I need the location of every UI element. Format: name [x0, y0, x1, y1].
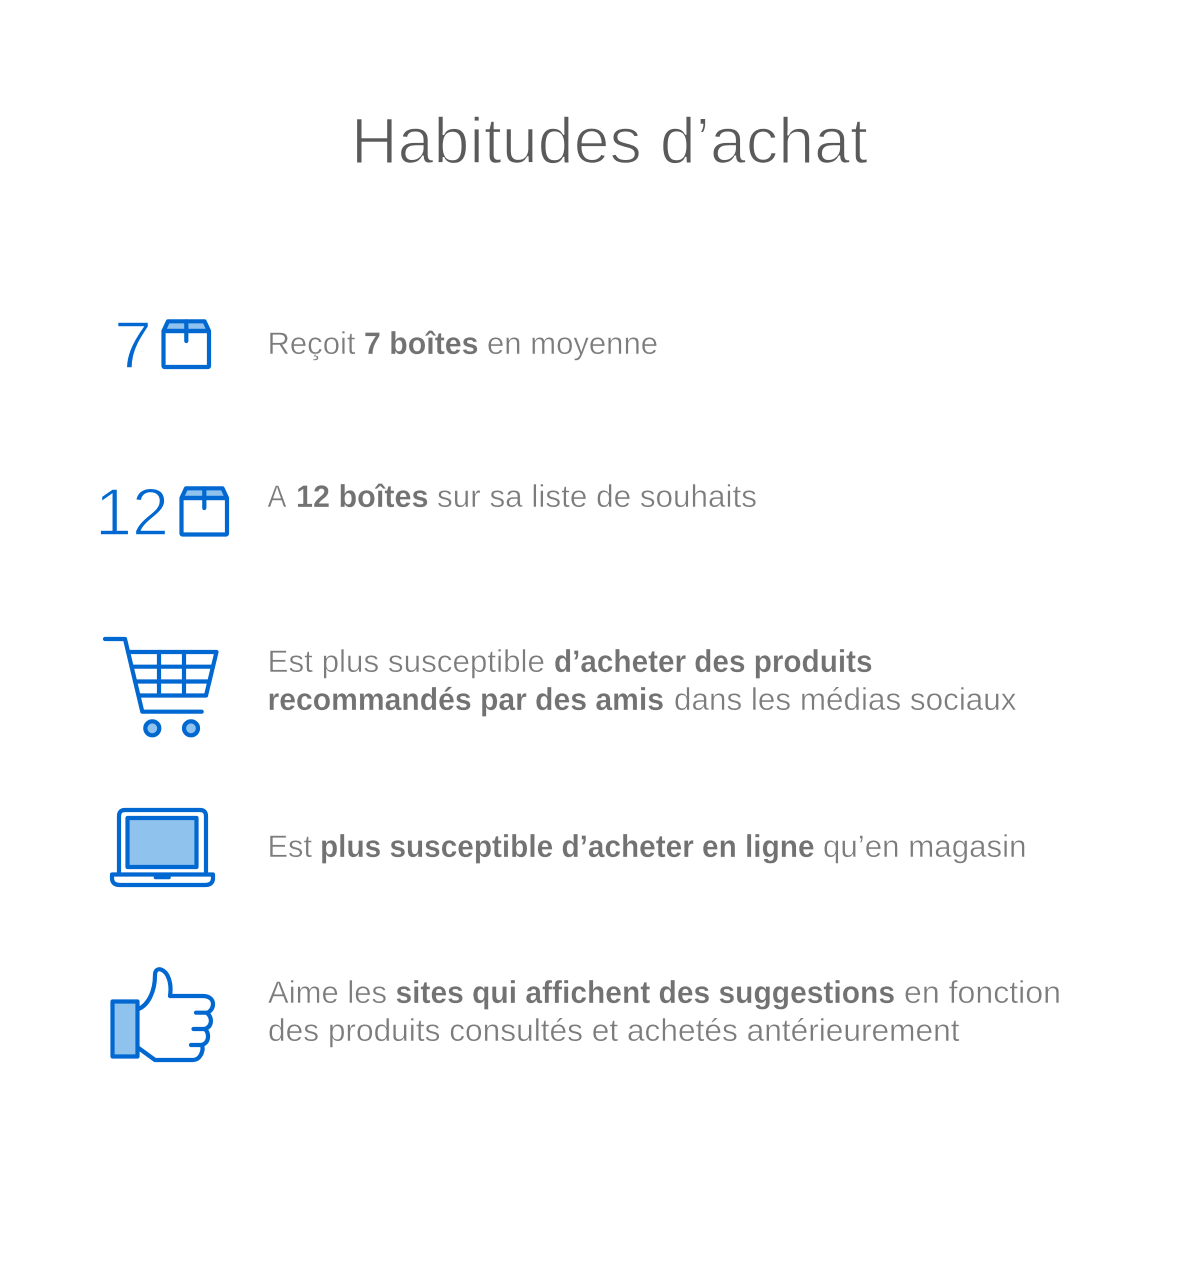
text: recommended by friends: d’acheter des produits	[554, 643, 872, 679]
icon: box	[182, 488, 227, 534]
row: laptop	[112, 810, 1026, 885]
text: wishlist	[268, 478, 757, 514]
text: suggestions: des produits consultés et achetés antérieurement	[268, 1012, 960, 1048]
text: online shopping: qu’en magasin	[823, 828, 1026, 864]
row: shopping cart	[105, 639, 1017, 735]
icon: box	[164, 321, 209, 367]
row: 7 boxes	[114, 308, 658, 383]
text: wishlist: sur sa liste de souhaits	[437, 478, 757, 514]
text: suggestions: sites qui affichent des suggestions	[396, 974, 895, 1010]
number 12: 12	[95, 475, 169, 550]
text: online shopping: plus susceptible d’acheter en ligne	[320, 828, 814, 864]
text: receives 7 boxes	[268, 325, 658, 361]
text: wishlist: A	[268, 478, 286, 514]
text: recommended by friends: recommandés par des amis	[268, 681, 664, 717]
number 7: 7	[114, 308, 152, 383]
title: Habitudes d’achat	[351, 104, 868, 177]
icon: thumbs up	[112, 969, 213, 1060]
text: recommended by friends	[268, 643, 1017, 717]
row: thumbs up	[112, 969, 1061, 1060]
text: receives 7 boxes: Reçoit	[268, 325, 356, 361]
text: recommended by friends: dans les médias sociaux	[674, 681, 1017, 717]
text: recommended by friends: Est plus susceptible	[268, 643, 545, 679]
text: suggestions	[268, 974, 1061, 1048]
text: receives 7 boxes: 7 boîtes	[364, 325, 478, 361]
icon: shopping cart	[105, 639, 216, 735]
text: suggestions: en fonction	[904, 974, 1061, 1010]
text: wishlist: 12 boîtes	[296, 478, 428, 514]
text: online shopping	[268, 828, 1026, 864]
icon: laptop	[112, 810, 213, 885]
row: 12 boxes	[95, 475, 757, 550]
text: online shopping: Est	[268, 828, 312, 864]
text: suggestions: Aime les	[268, 974, 387, 1010]
text: receives 7 boxes: en moyenne	[487, 325, 658, 361]
